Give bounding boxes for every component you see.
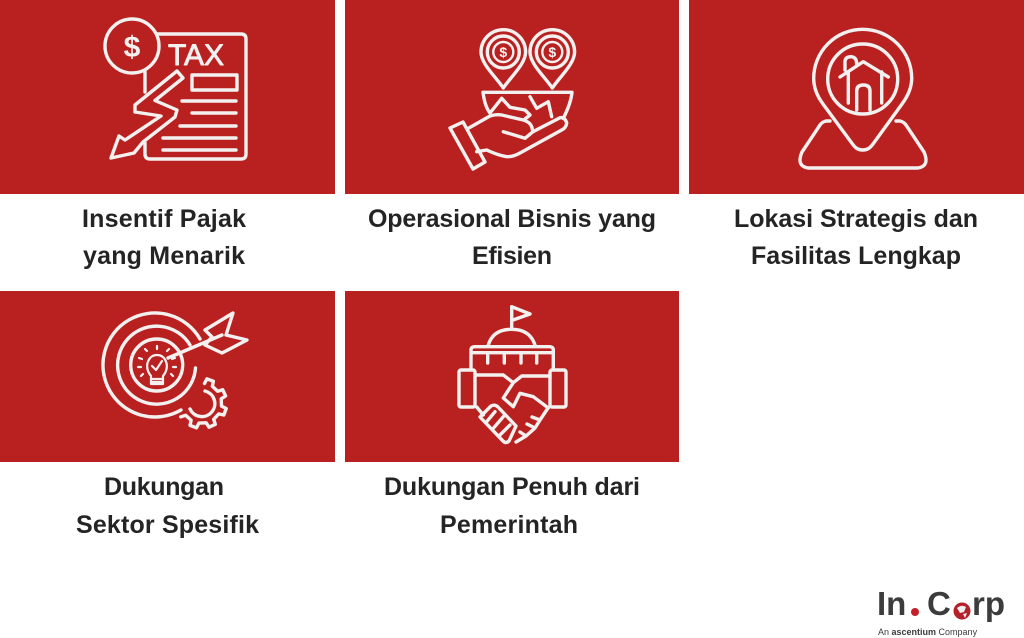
logo: InCorp (877, 585, 1005, 637)
heading: insentif pajak (82, 205, 246, 270)
panel: dukungan sektor (0, 291, 335, 462)
logo: InCorp: In (877, 585, 906, 622)
icon: hand holding globe with pins: $ (499, 44, 507, 60)
icon: tax document: $ (124, 31, 141, 64)
heading: dukungan pemerintah (384, 473, 640, 539)
icon: hand holding globe with pins: $ (548, 44, 556, 60)
panel: lokasi strategis (689, 0, 1024, 194)
icon: location pin with house (800, 29, 926, 168)
heading: dukungan sektor: Dukungan (104, 473, 224, 501)
heading: insentif pajak: Insentif Pajak (82, 205, 246, 233)
heading: lokasi strategis: Lokasi Strategis dan (734, 205, 978, 233)
icon: tax document (105, 19, 246, 159)
heading: dukungan pemerintah: Pemerintah (440, 511, 578, 539)
heading: dukungan pemerintah: Dukungan Penuh dari (384, 473, 640, 501)
icon: government handshake (459, 307, 566, 442)
heading: operasional bisnis: Efisien (472, 242, 552, 270)
heading: lokasi strategis (734, 205, 978, 270)
heading: dukungan sektor: Sektor Spesifik (76, 511, 259, 539)
logo: InCorp: An ascentium Company (878, 627, 978, 637)
logo: InCorp: rp (972, 585, 1005, 622)
heading: operasional bisnis (368, 205, 656, 270)
icon: target with arrow and gear (103, 313, 247, 428)
icon: tax document: TAX (168, 39, 224, 72)
heading: operasional bisnis: Operasional Bisnis yang (368, 205, 656, 233)
heading: insentif pajak: yang Menarik (83, 242, 245, 270)
panel: operasional bisnis (345, 0, 679, 194)
heading: dukungan sektor (76, 473, 259, 539)
logo: InCorp: C (927, 585, 951, 622)
heading: lokasi strategis: Fasilitas Lengkap (751, 242, 961, 270)
icon: hand holding globe with pins (450, 30, 575, 169)
panel: dukungan pemerintah (345, 291, 679, 462)
panel: insentif pajak (0, 0, 335, 194)
